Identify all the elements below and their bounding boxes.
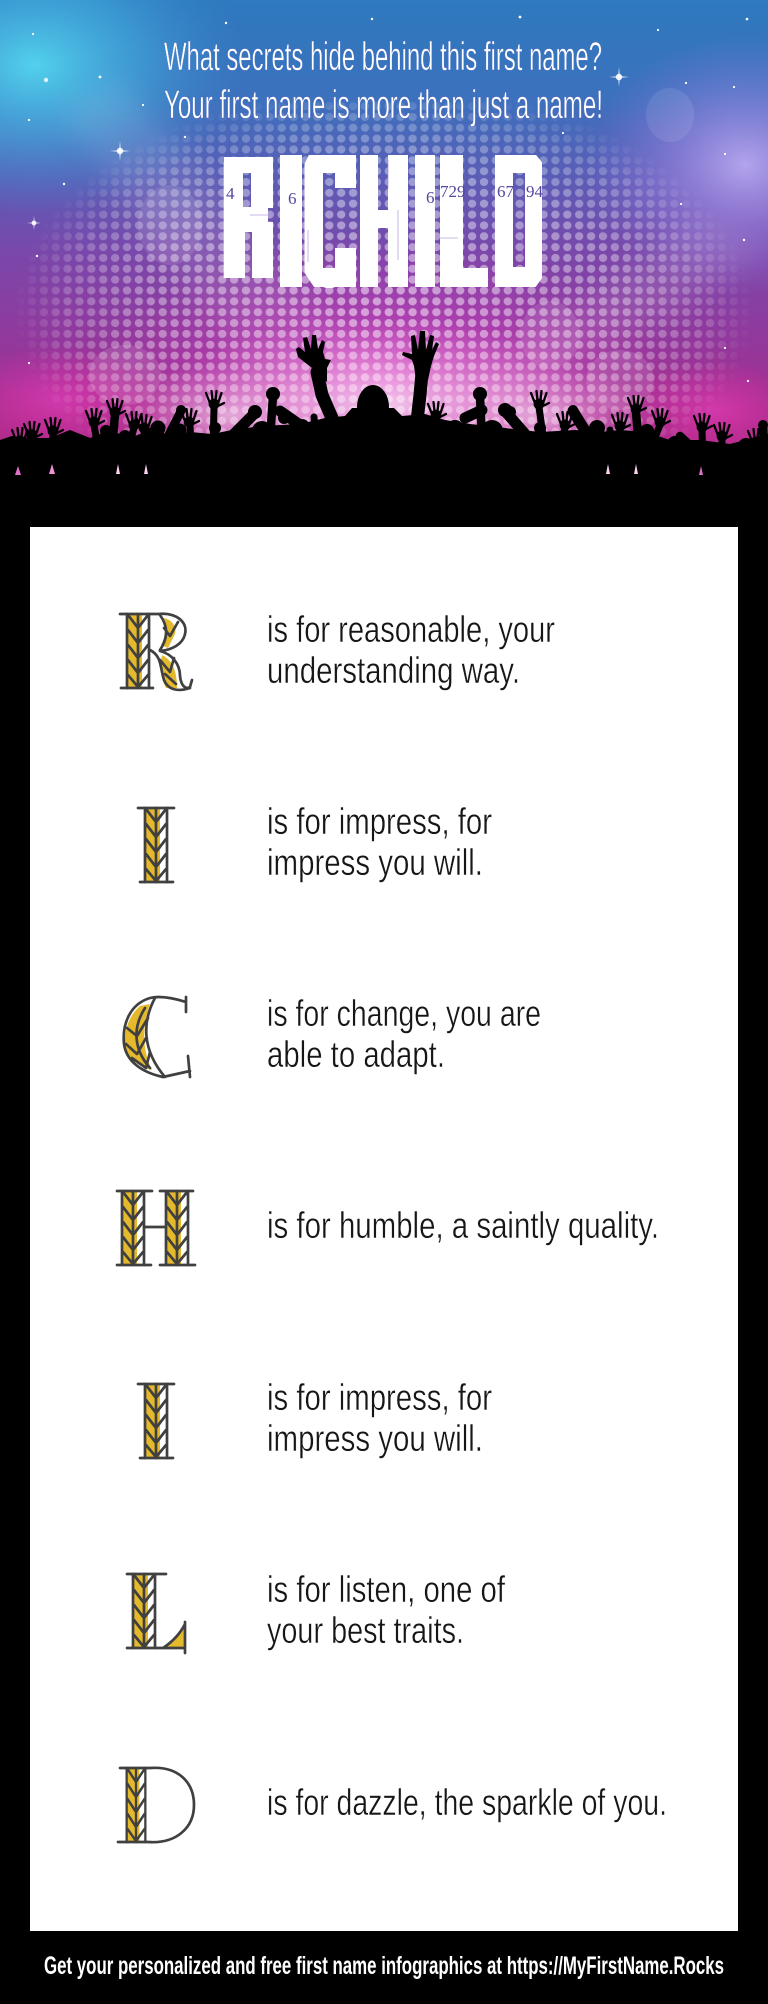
text: R meaning — [267, 609, 555, 691]
icon: big raised left hand — [296, 335, 331, 382]
row: I — [138, 801, 492, 883]
header: concert background — [0, 0, 768, 535]
text: I meaning: is for impress, for — [267, 801, 492, 842]
title: first name: 6 — [426, 188, 434, 207]
text: I meaning: is for impress, for — [267, 1377, 492, 1418]
text: L meaning: is for listen, one of — [267, 1569, 506, 1610]
text: R meaning: understanding way. — [267, 650, 520, 691]
text: I meaning — [267, 1377, 492, 1459]
title: first name: 4 — [226, 184, 235, 203]
icon: letter C — [124, 997, 190, 1077]
icon: letter H — [117, 1191, 195, 1265]
text: C meaning: able to adapt. — [267, 1034, 445, 1075]
icon: letter I — [138, 1384, 174, 1458]
row: L — [127, 1569, 506, 1653]
text: H meaning: is for humble, a saintly quality. — [267, 1205, 659, 1246]
title: first name: 6 — [288, 189, 296, 208]
row: R — [120, 609, 555, 691]
row: C — [124, 993, 541, 1077]
panel: letter meanings — [30, 527, 738, 1931]
text: I meaning: impress you will. — [267, 842, 483, 883]
row: I — [138, 1377, 492, 1459]
icon: letter I — [138, 808, 174, 882]
title: question lines — [164, 35, 603, 127]
text: I meaning: impress you will. — [267, 1418, 483, 1459]
crowd silhouette — [0, 331, 768, 530]
text: I meaning — [267, 801, 492, 883]
icon: letter L — [127, 1574, 185, 1653]
title: first name: 729 — [440, 182, 466, 201]
text: L meaning — [267, 1569, 506, 1651]
text: L meaning: your best traits. — [267, 1610, 464, 1651]
icon: letter D — [118, 1768, 194, 1842]
text: R meaning: is for reasonable, your — [267, 609, 555, 650]
title: first name: 94 — [526, 182, 544, 201]
icon: letter R — [120, 614, 192, 690]
icon: big raised right hand — [402, 331, 439, 380]
text: C meaning — [267, 993, 541, 1075]
title: first name: 67 — [497, 182, 514, 201]
row: H — [117, 1191, 659, 1265]
row: D — [118, 1768, 667, 1842]
stars — [27, 16, 749, 382]
title: first name: RICHILD — [226, 150, 541, 301]
text: C meaning: is for change, you are — [267, 993, 541, 1034]
